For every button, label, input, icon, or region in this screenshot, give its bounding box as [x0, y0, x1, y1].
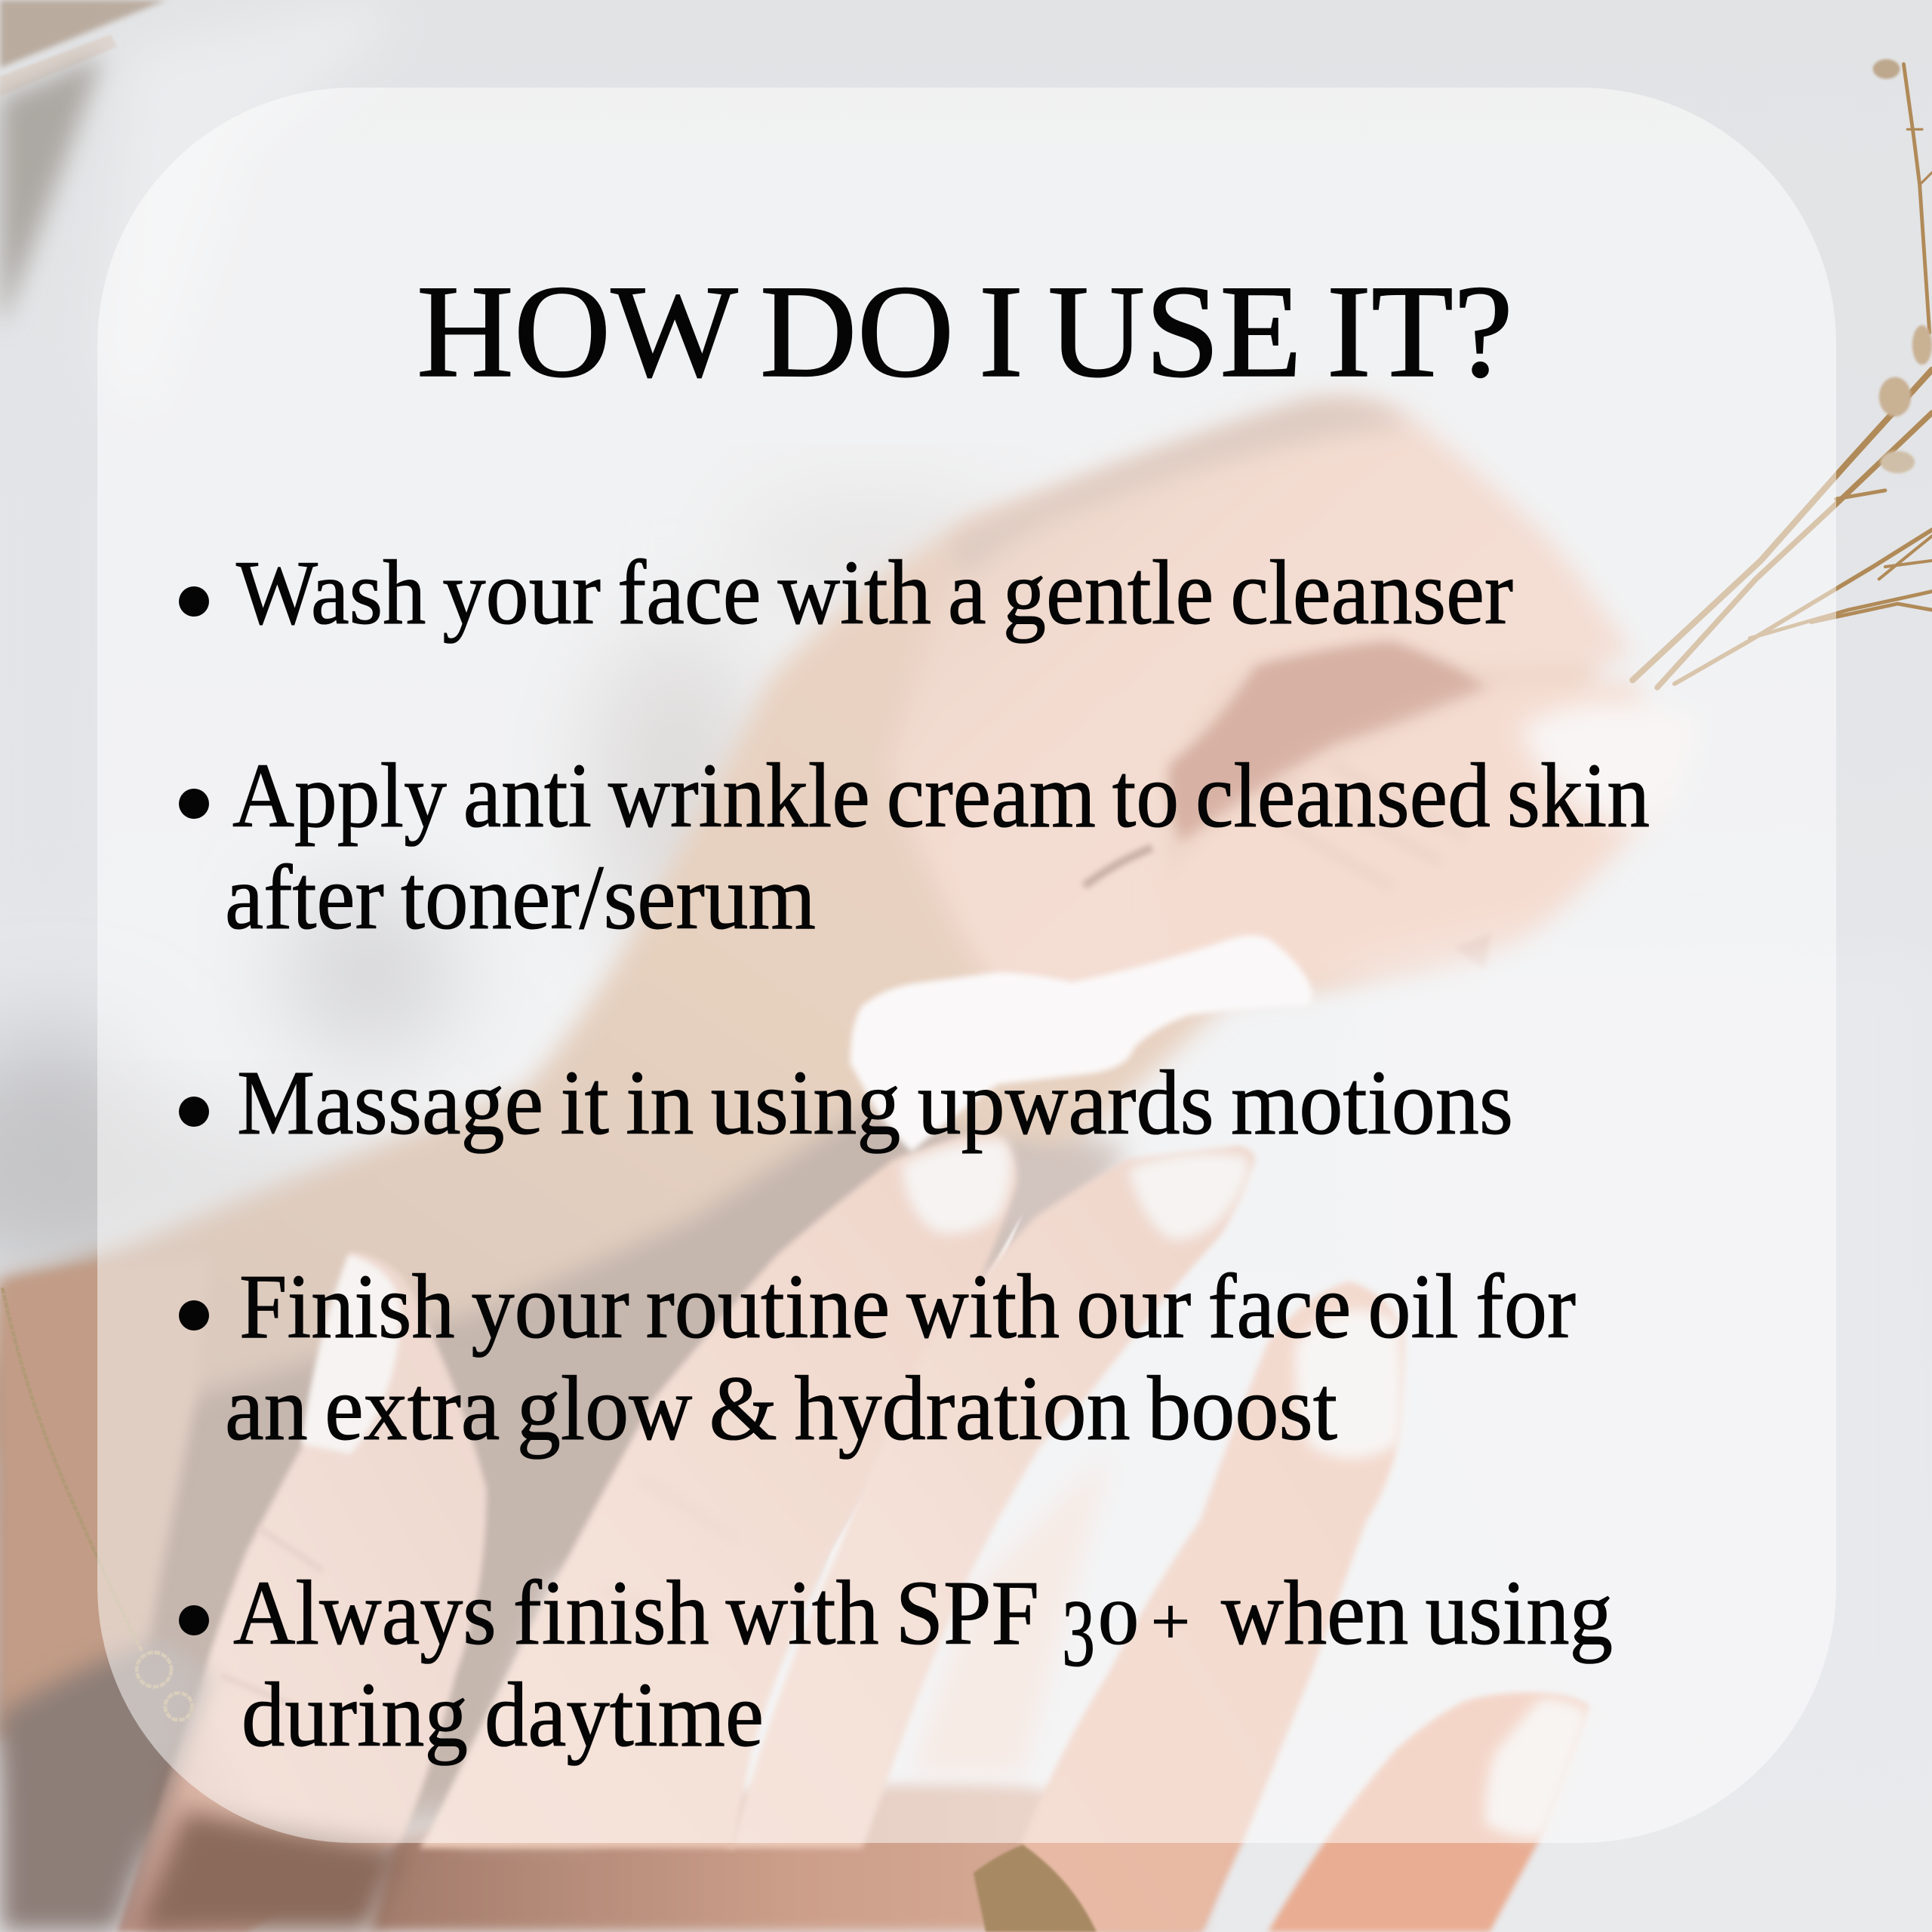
step 4: finish: Finish your routine with our face oil for	[239, 1256, 1576, 1358]
gap between fingers	[1168, 641, 1490, 844]
dark gap between finger tips	[986, 1146, 1128, 1343]
title: HOW DO I USE IT?	[417, 258, 1513, 405]
step 5: SPF: Always finish with SPF	[233, 1562, 1039, 1664]
pale skin tone between lower fingers	[912, 1454, 1109, 1774]
dried flower twigs	[1632, 64, 1932, 688]
dried flower buds	[1873, 59, 1932, 473]
step 5: SPF: during daytime	[242, 1664, 764, 1766]
step 5: SPF: +	[1151, 1586, 1190, 1659]
little finger with nail	[1268, 1693, 1589, 1932]
step 1: wash: Wash your face with a gentle cleanser	[236, 542, 1513, 644]
bracelet chain and charm	[2, 1287, 192, 1720]
peach base of fingers along bottom edge	[370, 1785, 1232, 1932]
step 5: SPF: 3	[1062, 1581, 1095, 1687]
step 2: apply: after toner/serum	[225, 847, 816, 949]
shirt fabric and sleeve, top left	[0, 0, 1023, 1263]
pale strip beside finger two	[752, 1214, 1023, 1774]
forearm and hand	[0, 399, 1632, 1454]
finger four with nail	[997, 1281, 1404, 1932]
finger one with nail	[117, 1252, 487, 1932]
cream swirl	[851, 935, 1312, 1152]
thumb and lower palm	[1084, 678, 1700, 986]
finger two with nail	[419, 1128, 1017, 1848]
step 5: SPF	[179, 1562, 1613, 1766]
step 5: SPF: when using	[1221, 1562, 1613, 1664]
gold ring	[974, 1844, 1097, 1932]
finger three with nail	[727, 1146, 1255, 1848]
pale strip between fingers	[456, 1577, 666, 1836]
wrist and dark lower-left hand	[0, 1257, 407, 1932]
step 2: apply	[179, 745, 1650, 949]
step 4: finish: an extra glow & hydration boost	[225, 1358, 1337, 1460]
step 2: apply: Apply anti wrinkle cream to cleansed skin	[232, 745, 1650, 847]
shadow under arm	[0, 986, 1109, 1848]
white surface right of fingers	[1355, 949, 1932, 1725]
step 5: SPF: 0	[1098, 1588, 1139, 1658]
step 4: finish	[179, 1256, 1576, 1460]
step 3: massage: Massage it in using upwards motions	[237, 1052, 1513, 1154]
